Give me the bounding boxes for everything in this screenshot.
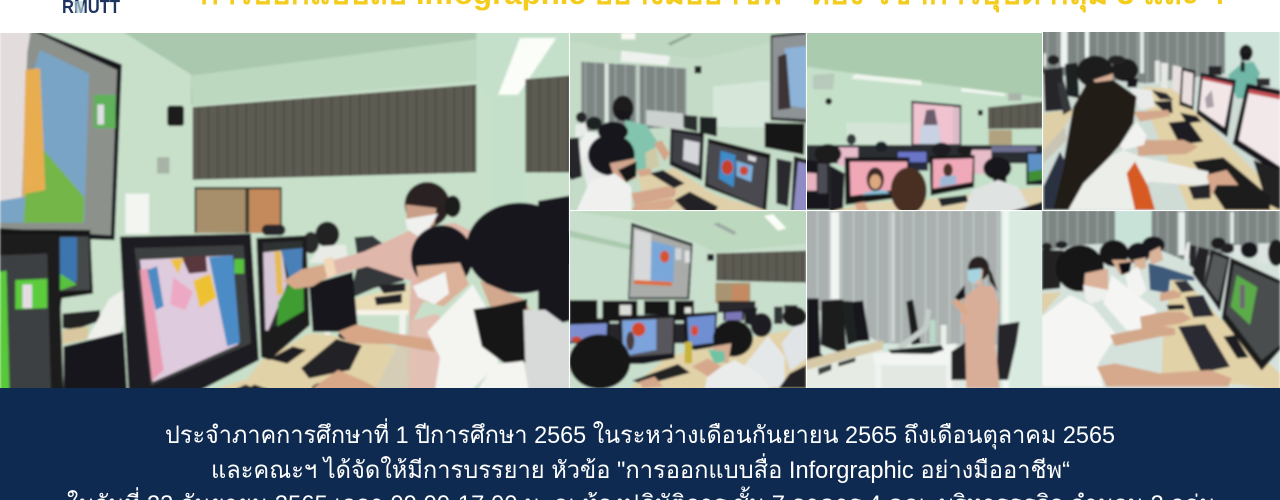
left desk bbox=[1043, 109, 1075, 150]
ceiling light bbox=[498, 38, 556, 95]
back row monitors bbox=[569, 300, 597, 320]
presenter bbox=[1239, 45, 1253, 61]
photo: computer lab with assistant in teal shirt bbox=[568, 30, 810, 213]
second monitor bbox=[930, 155, 975, 196]
projection screen bbox=[771, 32, 806, 123]
rear door bbox=[195, 187, 282, 233]
keyboards bbox=[1168, 121, 1203, 145]
pillar bbox=[1225, 30, 1280, 88]
air conditioner bbox=[621, 51, 670, 65]
projection screen bbox=[628, 223, 693, 299]
monitors bbox=[806, 298, 825, 360]
student with ponytail bbox=[983, 157, 1011, 180]
ceiling light bbox=[764, 214, 786, 231]
photo: speaker with microphone beside curtains bbox=[801, 210, 1048, 390]
photo: wide view of classroom and pink presentation bbox=[801, 30, 1048, 217]
counter bbox=[806, 340, 883, 370]
student with glasses bbox=[410, 224, 473, 278]
keyboard bbox=[632, 364, 690, 385]
curtains bbox=[801, 210, 1001, 345]
monitor left bbox=[801, 159, 830, 210]
monitor rows bbox=[806, 145, 1043, 163]
students bbox=[1077, 56, 1113, 88]
desk bbox=[831, 186, 1042, 210]
left monitor and desk bbox=[1042, 250, 1063, 290]
whiteboard bbox=[713, 81, 770, 127]
white table bbox=[873, 343, 956, 365]
window blinds bbox=[193, 85, 476, 180]
keyboards bbox=[1178, 324, 1230, 373]
desk bbox=[215, 333, 396, 388]
curtains bbox=[1042, 210, 1115, 252]
back monitor left bbox=[17, 228, 94, 308]
keyboards bbox=[650, 170, 685, 188]
auburn-haired student bbox=[891, 167, 927, 214]
chair bbox=[996, 322, 1020, 380]
monitor 2 bbox=[1197, 73, 1236, 137]
hp stand bbox=[235, 384, 252, 388]
computer mice bbox=[310, 382, 320, 388]
right monitor bbox=[1026, 152, 1043, 185]
desk bbox=[630, 327, 808, 390]
students bbox=[576, 112, 587, 123]
caption line 2: และคณะฯ ได้จัดให้มีการบรรยาย หัวข้อ "การออกแบบสื่อ Inforgraphic อย่างมืออาชีพ“ bbox=[211, 453, 1070, 484]
monitors right bbox=[1184, 242, 1190, 260]
woman with long hair bbox=[1049, 80, 1137, 210]
desk centre bbox=[1143, 87, 1280, 213]
left monitors bbox=[1043, 67, 1065, 112]
speaker bbox=[951, 256, 1000, 388]
monitor 1 bbox=[1233, 83, 1280, 175]
ceiling lights bbox=[851, 74, 921, 85]
wall speaker bbox=[167, 106, 184, 126]
back monitors bbox=[646, 110, 683, 130]
door bbox=[715, 283, 750, 303]
blinds bbox=[716, 251, 806, 283]
podium monitor and gooseneck mic bbox=[906, 299, 921, 345]
navy information band bbox=[0, 388, 1280, 500]
photo: students at keyboards, woman with long hair bbox=[1040, 30, 1280, 213]
chair back bbox=[61, 330, 129, 388]
projection screen bbox=[0, 30, 122, 240]
caption line 1: ประจำภาคการศึกษาที่ 1 ปีการศึกษา 2565 ในระหว่างเดือนกันยายน 2565 ถึงเดือนตุลาคม 2565 bbox=[165, 418, 1115, 450]
monitor 2 bbox=[670, 128, 704, 181]
students bbox=[1142, 236, 1165, 254]
keyboards bbox=[250, 384, 268, 388]
whiteboard bbox=[846, 122, 911, 145]
back monitors bbox=[1155, 61, 1160, 83]
monitor at edge bbox=[790, 155, 806, 210]
desk bbox=[1162, 278, 1280, 390]
photo: lecturer pointing at a student's monitor bbox=[0, 33, 569, 388]
students in the back bbox=[315, 222, 339, 247]
blinds and door bbox=[988, 102, 1043, 129]
blinds bbox=[581, 62, 686, 132]
desk bbox=[638, 168, 766, 210]
photo: row of students in white shirts at computers bbox=[1040, 210, 1280, 390]
lecturer bbox=[332, 222, 472, 354]
left foreground monitor bbox=[47, 308, 66, 388]
projection screen bbox=[911, 101, 961, 145]
monitors with slide bbox=[569, 318, 610, 342]
students bbox=[569, 334, 630, 389]
drink bottle bbox=[685, 342, 692, 363]
back row heads and monitors bbox=[1211, 237, 1226, 249]
centre monitor bbox=[118, 232, 260, 388]
back row monitors and desk bbox=[349, 236, 407, 299]
main monitor bbox=[705, 138, 771, 211]
photo: students viewing lecture slide on projection screen bbox=[568, 210, 808, 390]
second monitor bbox=[256, 235, 310, 360]
white pillar bbox=[1001, 210, 1044, 390]
main monitor bbox=[845, 157, 910, 205]
front student bbox=[466, 203, 574, 294]
assistant bbox=[612, 96, 634, 121]
caption text bbox=[67, 418, 1215, 500]
curtains bbox=[1040, 30, 1225, 83]
